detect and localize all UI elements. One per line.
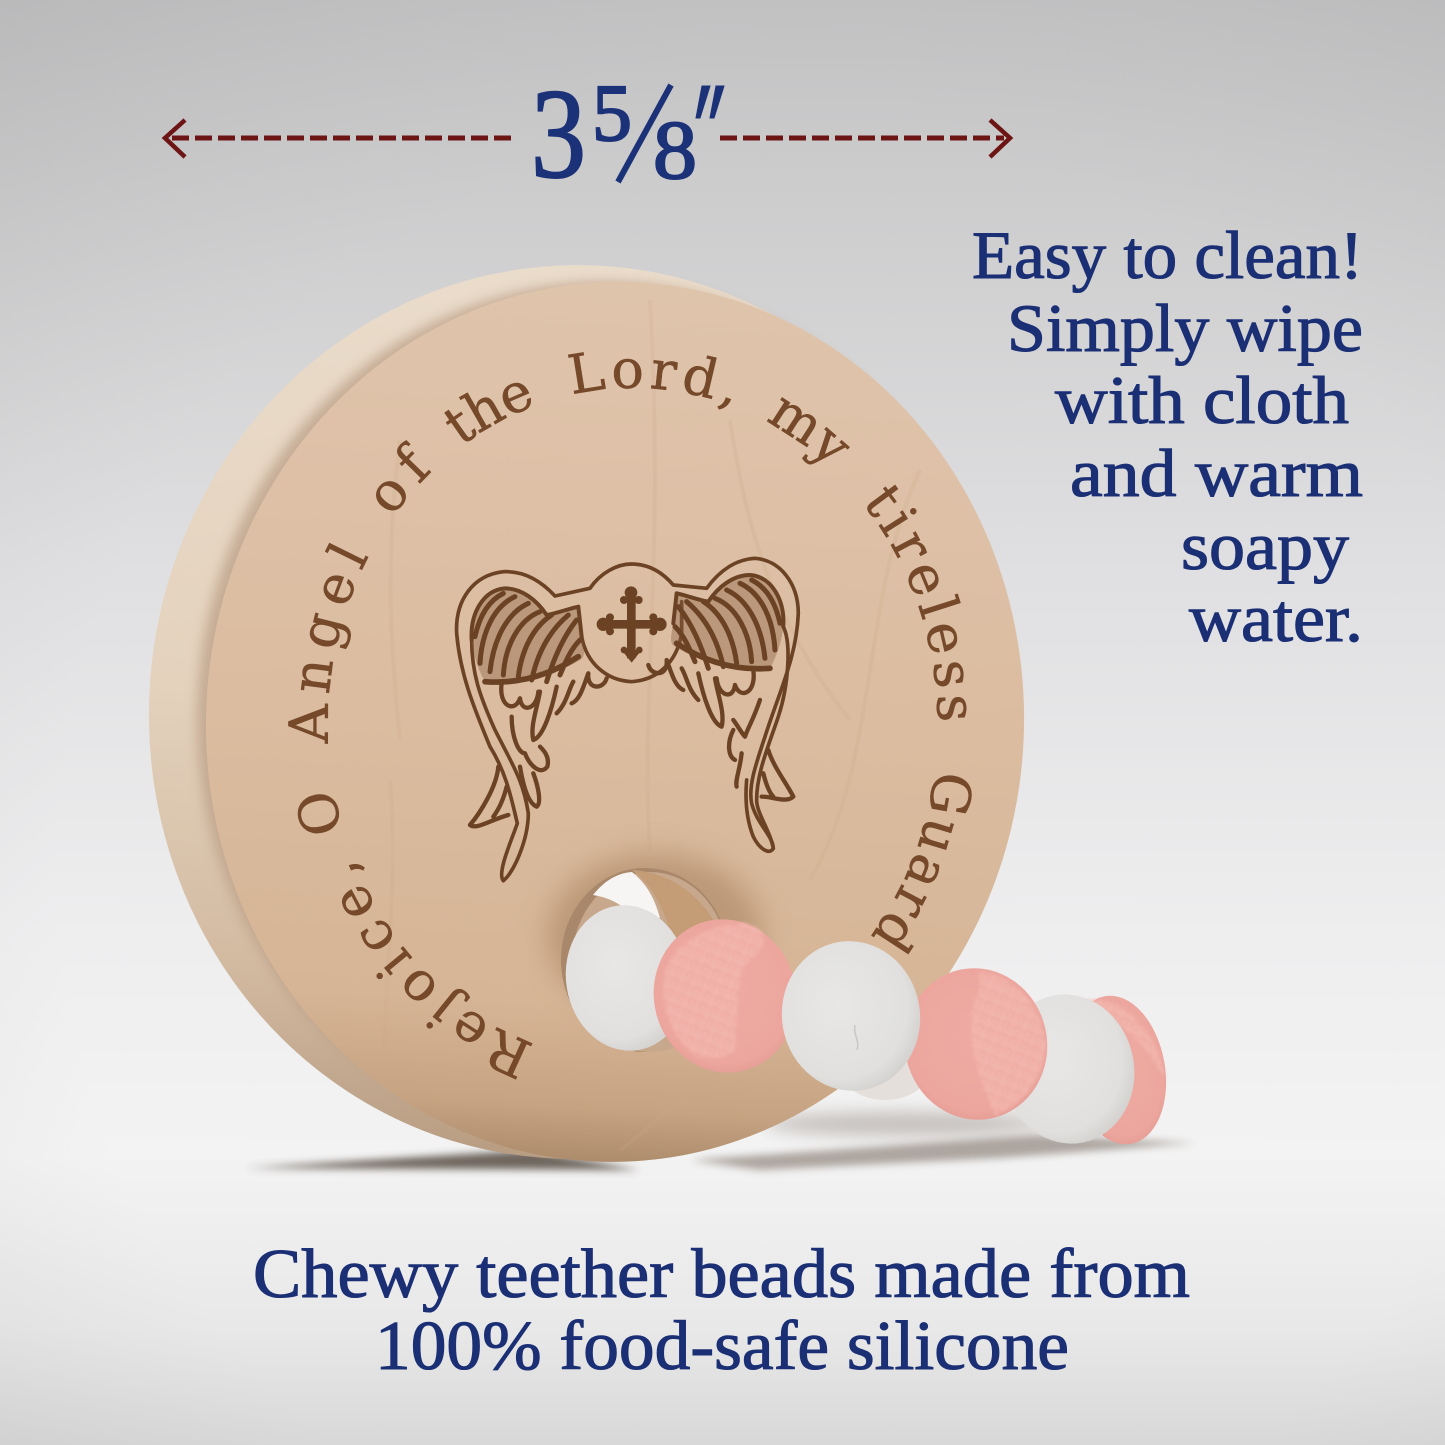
- engraved angel wings: [457, 558, 798, 881]
- hole: [547, 853, 763, 1052]
- cross: [597, 586, 667, 663]
- left inner band: [472, 640, 528, 881]
- engraved verse: tireless: [867, 484, 966, 720]
- dimension label: 3: [531, 63, 586, 205]
- callout: easy to clean: with cloth: [1055, 362, 1349, 438]
- callout: easy to clean: [972, 217, 1363, 656]
- engraved verse: the: [444, 382, 531, 442]
- callout: easy to clean: soapy: [1181, 508, 1349, 584]
- left lower feathers: [470, 717, 548, 826]
- engraved verse: [288, 352, 972, 1080]
- engraved verse: Guard: [871, 775, 972, 954]
- engraved verse: Angel: [288, 542, 368, 744]
- wooden disc: [148, 265, 1024, 1162]
- caption: silicone beads: 100% food-safe silicone: [375, 1308, 1069, 1385]
- right lower feathers: [729, 700, 793, 800]
- dimension label: 8: [653, 104, 697, 197]
- callout: easy to clean: and warm: [1070, 435, 1363, 511]
- wings outline: [457, 558, 798, 881]
- engraved verse: of: [376, 440, 432, 510]
- hidden white bead: [840, 1036, 930, 1100]
- engraved verse: Rejoice,: [342, 864, 532, 1080]
- engraved verse: O: [298, 794, 340, 834]
- callout: easy to clean: Simply wipe: [1007, 290, 1363, 366]
- right inner band: [757, 627, 788, 848]
- engraved verse: my: [766, 397, 850, 464]
- callout: easy to clean: water.: [1189, 580, 1363, 656]
- wood grain: [384, 300, 920, 1150]
- caption: silicone beads: Chewy teether beads made from: [253, 1236, 1190, 1313]
- engraved verse: Lord,: [568, 352, 732, 410]
- dimension arrow: [165, 120, 1010, 157]
- pink lace bead 2: [891, 955, 1061, 1133]
- pink lace bead 1: [637, 904, 813, 1088]
- dimension label: [531, 63, 724, 205]
- callout: easy to clean: Easy to clean!: [972, 217, 1363, 293]
- pink bead far right: [1059, 988, 1177, 1152]
- disc rim: [119, 236, 1031, 1188]
- ground shadow: [245, 1112, 1195, 1170]
- rim chamfer shadow: [175, 261, 1027, 1171]
- left feathers: [472, 588, 607, 740]
- caption: silicone beads: [253, 1236, 1190, 1385]
- right feathers: [648, 575, 783, 727]
- white bead far left: [556, 897, 698, 1059]
- white bead right: [988, 982, 1148, 1156]
- white bead middle: [770, 930, 932, 1102]
- disc face: [184, 261, 1046, 1183]
- dimension label: 5: [592, 67, 632, 158]
- silicone beads: [556, 897, 1177, 1156]
- centre medallion: [582, 602, 682, 682]
